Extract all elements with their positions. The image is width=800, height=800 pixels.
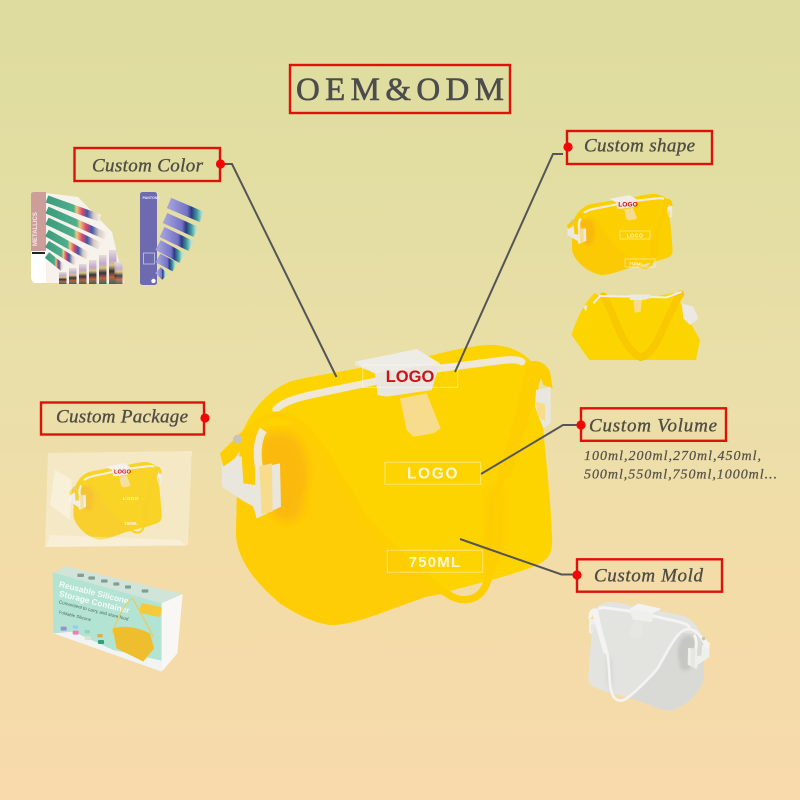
- label: custom color: [74, 148, 225, 181]
- package: transparent bag with product: 750ML: [124, 521, 138, 526]
- label: custom mold: [572, 559, 722, 592]
- label: custom shape: [563, 131, 712, 164]
- label: custom color: Custom Color: [92, 156, 204, 177]
- connector: custom volume: [481, 425, 581, 474]
- thumbnail: back view bag: [572, 292, 700, 360]
- title: OEM&ODM: [296, 72, 504, 108]
- label: custom package: [41, 402, 210, 434]
- package: retail box: Foldable Silicone: [58, 609, 92, 622]
- volume options text: 100ml,200ml,270ml,450ml,: [584, 449, 761, 464]
- label: custom mold: Custom Mold: [594, 566, 704, 587]
- thumbnail: front view bag: LOGO: [618, 202, 638, 208]
- package: transparent bag with product: LOGO: [114, 470, 132, 476]
- thumbnail: front view bag: 750ML: [629, 262, 643, 266]
- colour fan deck: metallics: [31, 192, 124, 284]
- package: retail box: Convenient to carry and store food: [58, 599, 129, 622]
- thumbnail: front view bag: [567, 194, 673, 275]
- label: custom package: Custom Package: [56, 406, 188, 427]
- connector: custom mold: [460, 539, 577, 574]
- bag body logo tag: [385, 462, 481, 484]
- package: retail box: Reusable Silicone: [58, 579, 130, 606]
- label: custom shape: Custom shape: [584, 136, 695, 157]
- bag top logo tag: [363, 365, 458, 387]
- colour fan deck: purple: PANTONE: [142, 196, 160, 200]
- bag volume tag: 750ML: [409, 554, 461, 571]
- connector: custom shape: [455, 154, 563, 372]
- bag top logo tag: LOGO: [386, 368, 434, 386]
- label: custom volume: Custom Volume: [589, 416, 717, 437]
- package: transparent bag with product: [45, 451, 192, 547]
- main product: yellow silicone bag: [220, 345, 553, 625]
- package: transparent bag with product: LOGO: [123, 496, 139, 502]
- colour fan deck: purple: [140, 192, 202, 285]
- volume options text: 500ml,550ml,750ml,1000ml...: [584, 468, 777, 482]
- label: custom volume: [576, 408, 726, 441]
- bag body logo tag: LOGO: [407, 466, 459, 482]
- thumbnail: front view bag: LOGO: [627, 234, 643, 240]
- package: retail box: Storage Container: [58, 588, 131, 616]
- connector: custom color: [222, 164, 336, 377]
- bag volume tag: [387, 550, 483, 572]
- package: retail box: [53, 567, 183, 672]
- custom mold: white 3D model bag: [588, 602, 710, 710]
- volume options text: [584, 449, 777, 482]
- colour fan deck: metallics: METALLICS: [33, 212, 39, 246]
